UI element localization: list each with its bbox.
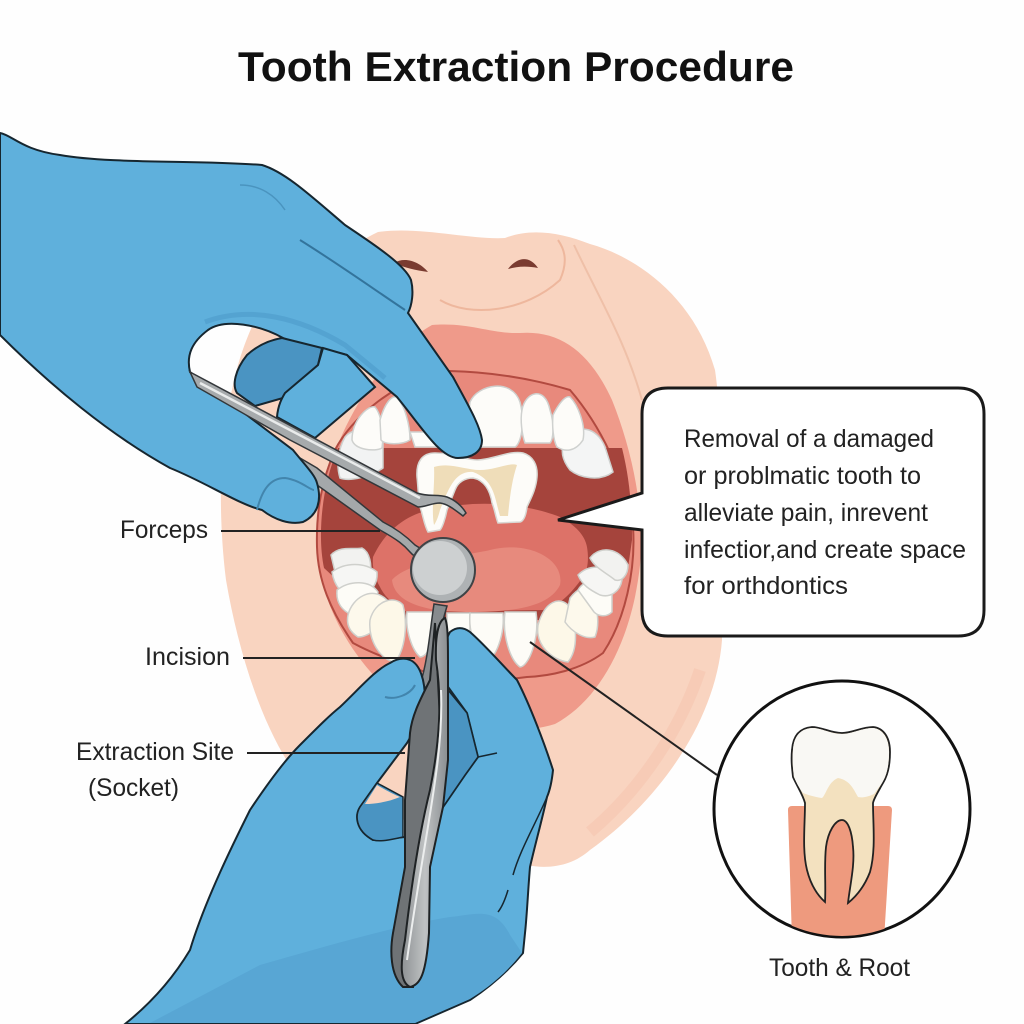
label: Extraction Site (Socket): Extraction Site — [76, 738, 234, 766]
illustration: lower gloved hand — [125, 618, 553, 1024]
illustration: forceps upper arm — [190, 372, 466, 516]
tongue — [373, 504, 588, 612]
throat — [321, 448, 632, 620]
pocket — [357, 783, 403, 841]
gum — [788, 806, 892, 940]
label: Extraction Site (Socket): (Socket) — [88, 774, 179, 802]
illustration: dental mirror — [411, 538, 475, 690]
shaded palm — [150, 914, 522, 1023]
light finger — [277, 348, 375, 438]
illustration: upper gloved hand — [0, 133, 482, 523]
illustration: forceps lower arm — [300, 458, 438, 561]
extracted tooth — [417, 452, 537, 532]
lower teeth — [331, 548, 628, 667]
callout — [558, 388, 984, 636]
callout: infectior,and create space — [684, 536, 966, 564]
label: Forceps: Forceps — [120, 516, 208, 544]
upper teeth — [338, 386, 613, 479]
callout: alleviate pain, inrevent — [684, 499, 928, 527]
tooth — [792, 727, 890, 903]
dark finger — [440, 690, 478, 807]
dark finger — [235, 338, 322, 406]
illustration: face — [221, 230, 722, 867]
label: Tooth & Root: Tooth & Root — [769, 954, 910, 982]
leader line to inset — [530, 642, 717, 775]
pliers handles — [391, 618, 448, 987]
callout: or problmatic tooth to — [684, 462, 921, 490]
callout: for orthdontics — [684, 572, 848, 600]
title: Tooth Extraction Procedure — [238, 43, 794, 90]
illustration: open mouth — [316, 325, 641, 730]
inset: tooth and root — [714, 681, 970, 940]
callout: Removal of a damaged — [684, 425, 934, 453]
label: Extraction Site (Socket) — [76, 738, 405, 802]
icon: nose — [394, 240, 565, 310]
enamel — [793, 728, 889, 798]
label: Incision: Incision — [145, 643, 230, 671]
